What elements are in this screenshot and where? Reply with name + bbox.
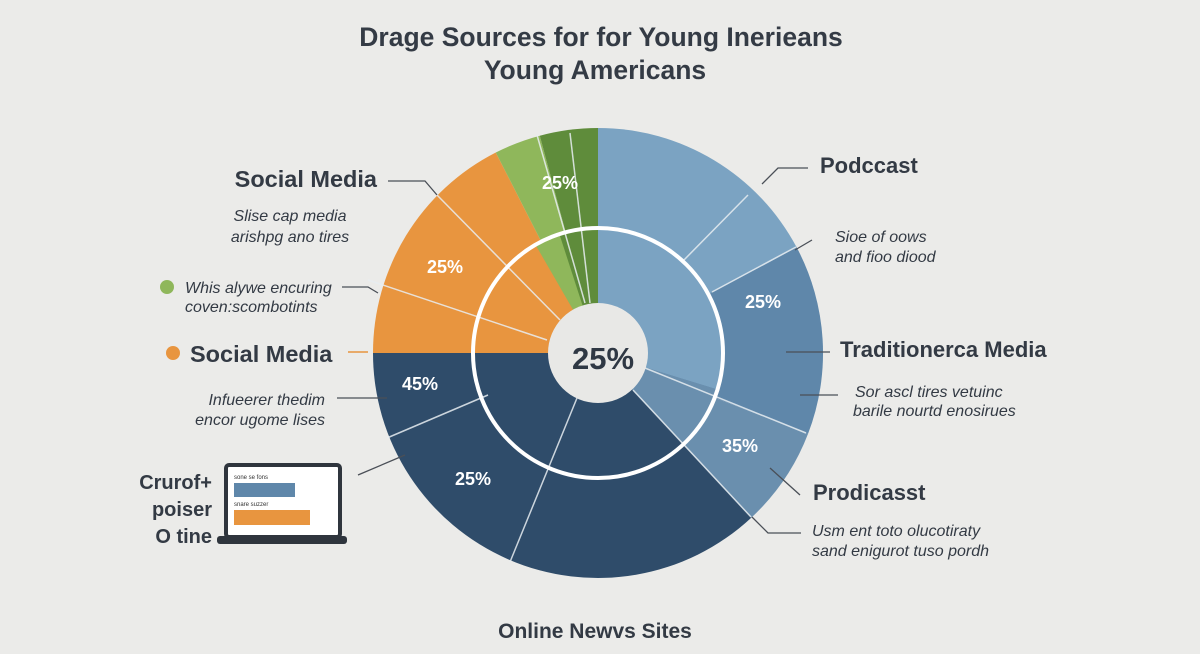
segment percentages: 25% xyxy=(427,257,463,277)
left labels xyxy=(139,166,378,548)
left labels: arishpg ano tires xyxy=(231,229,349,246)
center value: 25% xyxy=(572,341,634,376)
right labels: sand enigurot tuso pordh xyxy=(812,543,989,560)
icon: laptop: snare suzzer xyxy=(234,502,268,508)
title: Drage Sources for for Young Inerieans xyxy=(359,22,843,52)
label: social media top: Social Media xyxy=(235,166,378,192)
segment percentages: 25% xyxy=(455,469,491,489)
right labels: Sioe of oows xyxy=(835,229,927,246)
right labels xyxy=(812,153,1047,560)
label: social media orange xyxy=(166,346,180,360)
icon: laptop xyxy=(217,465,347,544)
segment percentages xyxy=(402,173,781,489)
left labels: Infueerer thedim xyxy=(208,392,325,409)
label: laptop side text: Crurof+ xyxy=(139,472,212,494)
left labels: Whis alywe encuring xyxy=(185,280,332,297)
segment percentages: 35% xyxy=(722,436,758,456)
left labels: Social Media xyxy=(190,341,333,367)
title xyxy=(359,22,843,85)
right labels: Usm ent toto olucotiraty xyxy=(812,523,981,540)
label: laptop side text xyxy=(139,472,212,548)
label: green dot text xyxy=(160,280,174,294)
left labels: coven:scombotints xyxy=(185,299,318,316)
left labels: Slise cap media xyxy=(234,208,347,225)
leader lines xyxy=(337,168,838,533)
label: laptop side text: poiser xyxy=(152,499,212,521)
right labels: and fioo diood xyxy=(835,249,937,266)
right labels: Podccast xyxy=(820,153,918,178)
right labels: Sor ascl tires vetuinc xyxy=(855,384,1003,401)
segment percentages: 45% xyxy=(402,374,438,394)
right labels: barile nourtd enosirues xyxy=(853,403,1016,420)
label: laptop side text: O tine xyxy=(155,526,212,548)
segment percentages: 25% xyxy=(745,292,781,312)
segment percentages: 25% xyxy=(542,173,578,193)
donut chart xyxy=(368,128,823,578)
right labels: Prodicasst xyxy=(813,480,926,505)
icon: laptop: sone se fons xyxy=(234,475,268,481)
right labels: Traditionerca Media xyxy=(840,337,1047,362)
title: Young Americans xyxy=(484,55,706,85)
bottom label: Online Newvs Sites xyxy=(498,620,692,643)
left labels: encor ugome lises xyxy=(195,412,325,429)
